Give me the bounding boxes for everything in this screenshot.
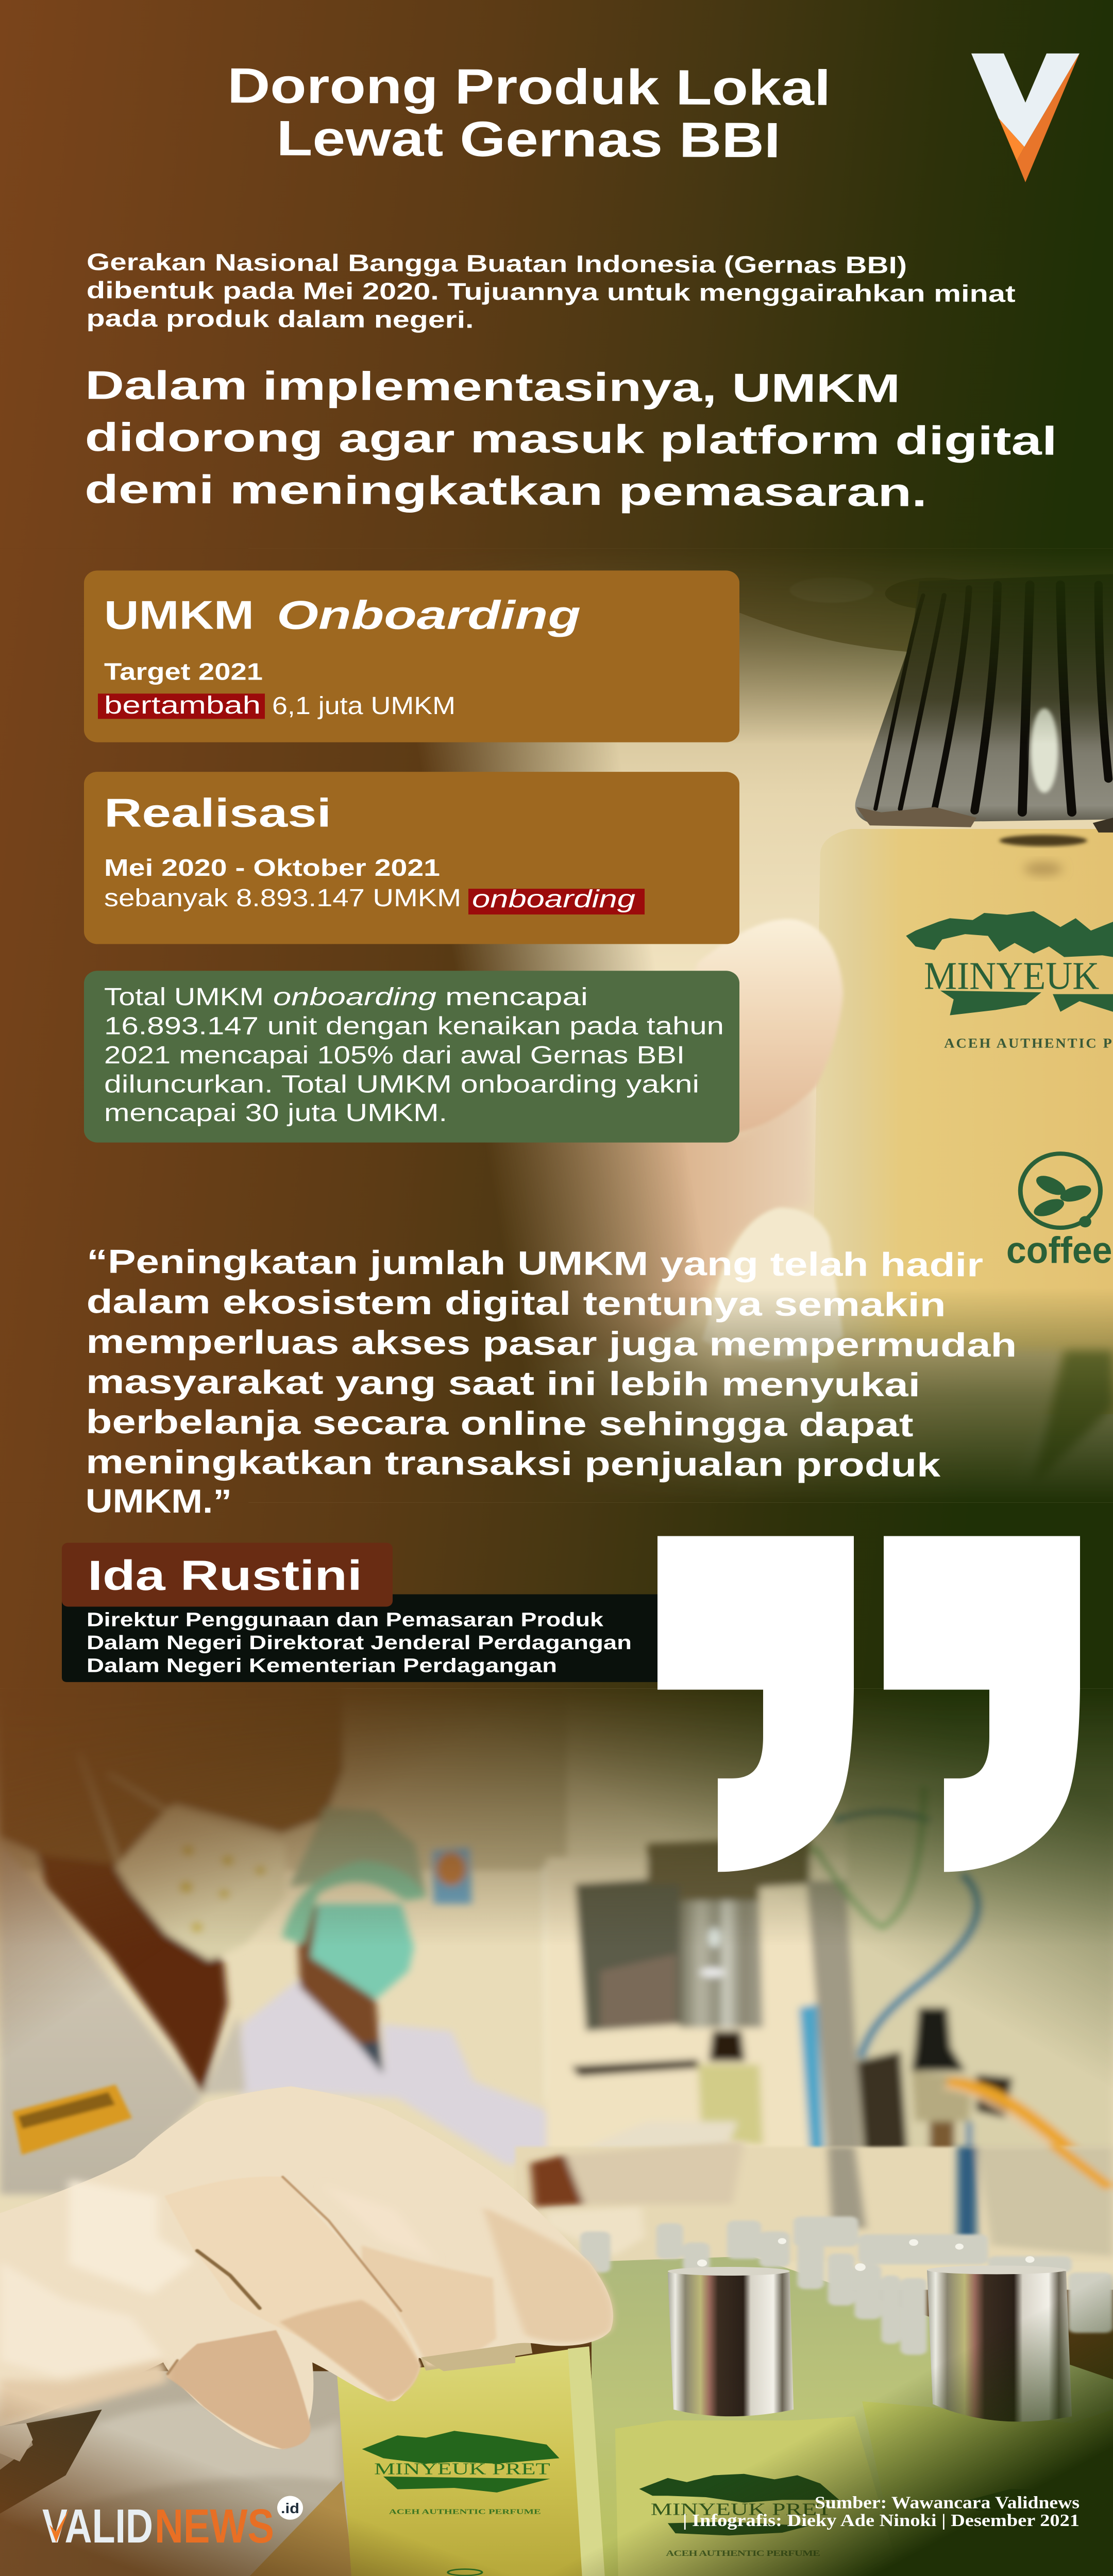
quote text: meningkatkan transaksi penjualan produk [86, 1444, 941, 1484]
bottle label: Minyeuk [906, 911, 1113, 1050]
quote text: berbelanja secara online sehingga dapat [86, 1403, 914, 1444]
quote text: dalam ekosistem digital tentunya semakin [87, 1283, 946, 1324]
lead statement: demi meningkatkan pemasaran. [85, 467, 927, 515]
front perfume bottle: ACEH AUTHENTIC PERFUME [389, 2508, 541, 2516]
lead statement [85, 363, 1057, 516]
panel: total UMKM onboarding summary: mencapai [445, 983, 588, 1010]
quote text: memperluas akses pasar juga mempermudah [86, 1323, 1017, 1364]
panel: Realisasi: Mei 2020 - Oktober 2021 [104, 855, 440, 882]
panel: total UMKM onboarding summary: mencapai 30 juta UMKM. [104, 1099, 447, 1126]
quote text: masyarakat yang saat ini lebih menyukai [86, 1363, 920, 1404]
second bottle label: MINYEUK PRET [651, 2499, 832, 2519]
speaker job title box [62, 1594, 657, 1682]
panel: UMKM Onboarding target [84, 570, 739, 742]
panel: UMKM Onboarding target: Target 2021 [104, 658, 263, 685]
second bottle label: ACEH AUTHENTIC PERFUME [666, 2549, 820, 2558]
icon: coffee logo [1006, 1154, 1112, 1271]
title: Lewat Gernas BBI [276, 111, 781, 168]
panel: total UMKM onboarding summary: diluncurkan. Total UMKM onboarding yakni [104, 1070, 699, 1098]
cloth, strap and wooden table [0, 2371, 353, 2576]
quote text [86, 1243, 1017, 1523]
photo: perfume production line with workers [0, 1574, 1113, 2576]
bottle label: Minyeuk: ACEH AUTHENTIC P [944, 1036, 1112, 1050]
speaker job title box: Dalam Negeri Kementerian Perdagangan [87, 1655, 557, 1676]
speaker name box: Ida Rustini [88, 1552, 362, 1599]
Validnews wordmark logo: .id [281, 2501, 299, 2517]
quote text: “Peningkatan jumlah UMKM yang telah hadir [87, 1243, 983, 1284]
panel: total UMKM onboarding summary: 16.893.147 unit dengan kenaikan pada tahun [104, 1012, 724, 1040]
filling machine, hoses and regulator [532, 1787, 1113, 2194]
panel: total UMKM onboarding summary [84, 971, 739, 1143]
Validnews wordmark logo [42, 2496, 303, 2553]
Validnews wordmark logo: NEWS [155, 2500, 274, 2553]
panel: UMKM Onboarding target: 6,1 juta UMKM [272, 692, 456, 720]
title: Dorong Produk Lokal [227, 58, 831, 116]
panel: Realisasi: onboarding [472, 885, 635, 913]
panel: Realisasi: sebanyak 8.893.147 UMKM [104, 884, 461, 912]
conveyor with silver caps [515, 2141, 1113, 2576]
source credit: Sumber: Wawancara Validnews [815, 2493, 1080, 2512]
panel: total UMKM onboarding summary: Total UMKM [104, 983, 264, 1010]
employee name tag [13, 2084, 132, 2155]
second bottle label [639, 2474, 839, 2558]
speaker job title box: Dalam Negeri Direktorat Jenderal Perdagangan [87, 1632, 632, 1654]
intro paragraph: Gerakan Nasional Bangga Buatan Indonesia (Gernas BBI) [87, 249, 907, 279]
panel: UMKM Onboarding target: UMKM [104, 593, 254, 638]
front perfume bottle [337, 2312, 605, 2576]
intro paragraph: dibentuk pada Mei 2020. Tujuannya untuk menggairahkan minat [87, 277, 1016, 308]
icon: Validnews V logo [971, 54, 1080, 182]
panel: UMKM Onboarding target: bertambah [104, 691, 261, 719]
intro paragraph: pada produk dalam negeri. [86, 305, 474, 333]
panel: total UMKM onboarding summary: 2021 mencapai 105% dari awal Gernas BBI [104, 1041, 685, 1069]
lead statement: didorong agar masuk platform digital [85, 415, 1057, 464]
title [227, 58, 831, 168]
panel: total UMKM onboarding summary: onboarding [273, 983, 436, 1010]
icon: closing quotation marks [657, 1536, 1080, 1872]
front perfume bottle: MINYEUK PRET [374, 2460, 550, 2478]
source credit: | Infografis: Dieky Ade Ninoki | Desember 2021 [683, 2510, 1080, 2530]
intro paragraph [86, 249, 1016, 335]
photo: perfume bottle held by gloved hand [248, 489, 1113, 1513]
large gloved hand [0, 2087, 613, 2449]
speaker name box [62, 1543, 393, 1607]
source credit [683, 2493, 1080, 2530]
panel: Realisasi: Realisasi [104, 791, 331, 836]
quote text: UMKM.” [86, 1483, 232, 1520]
background wall and woman with floral mask [0, 1603, 567, 2194]
lead statement: Dalam implementasinya, UMKM [85, 363, 900, 411]
Validnews wordmark logo: VALID [42, 2500, 153, 2553]
speaker job title box: Direktur Penggunaan dan Pemasaran Produk [87, 1609, 603, 1631]
panel: Realisasi [84, 772, 739, 944]
panel: UMKM Onboarding target: Onboarding [277, 593, 581, 638]
